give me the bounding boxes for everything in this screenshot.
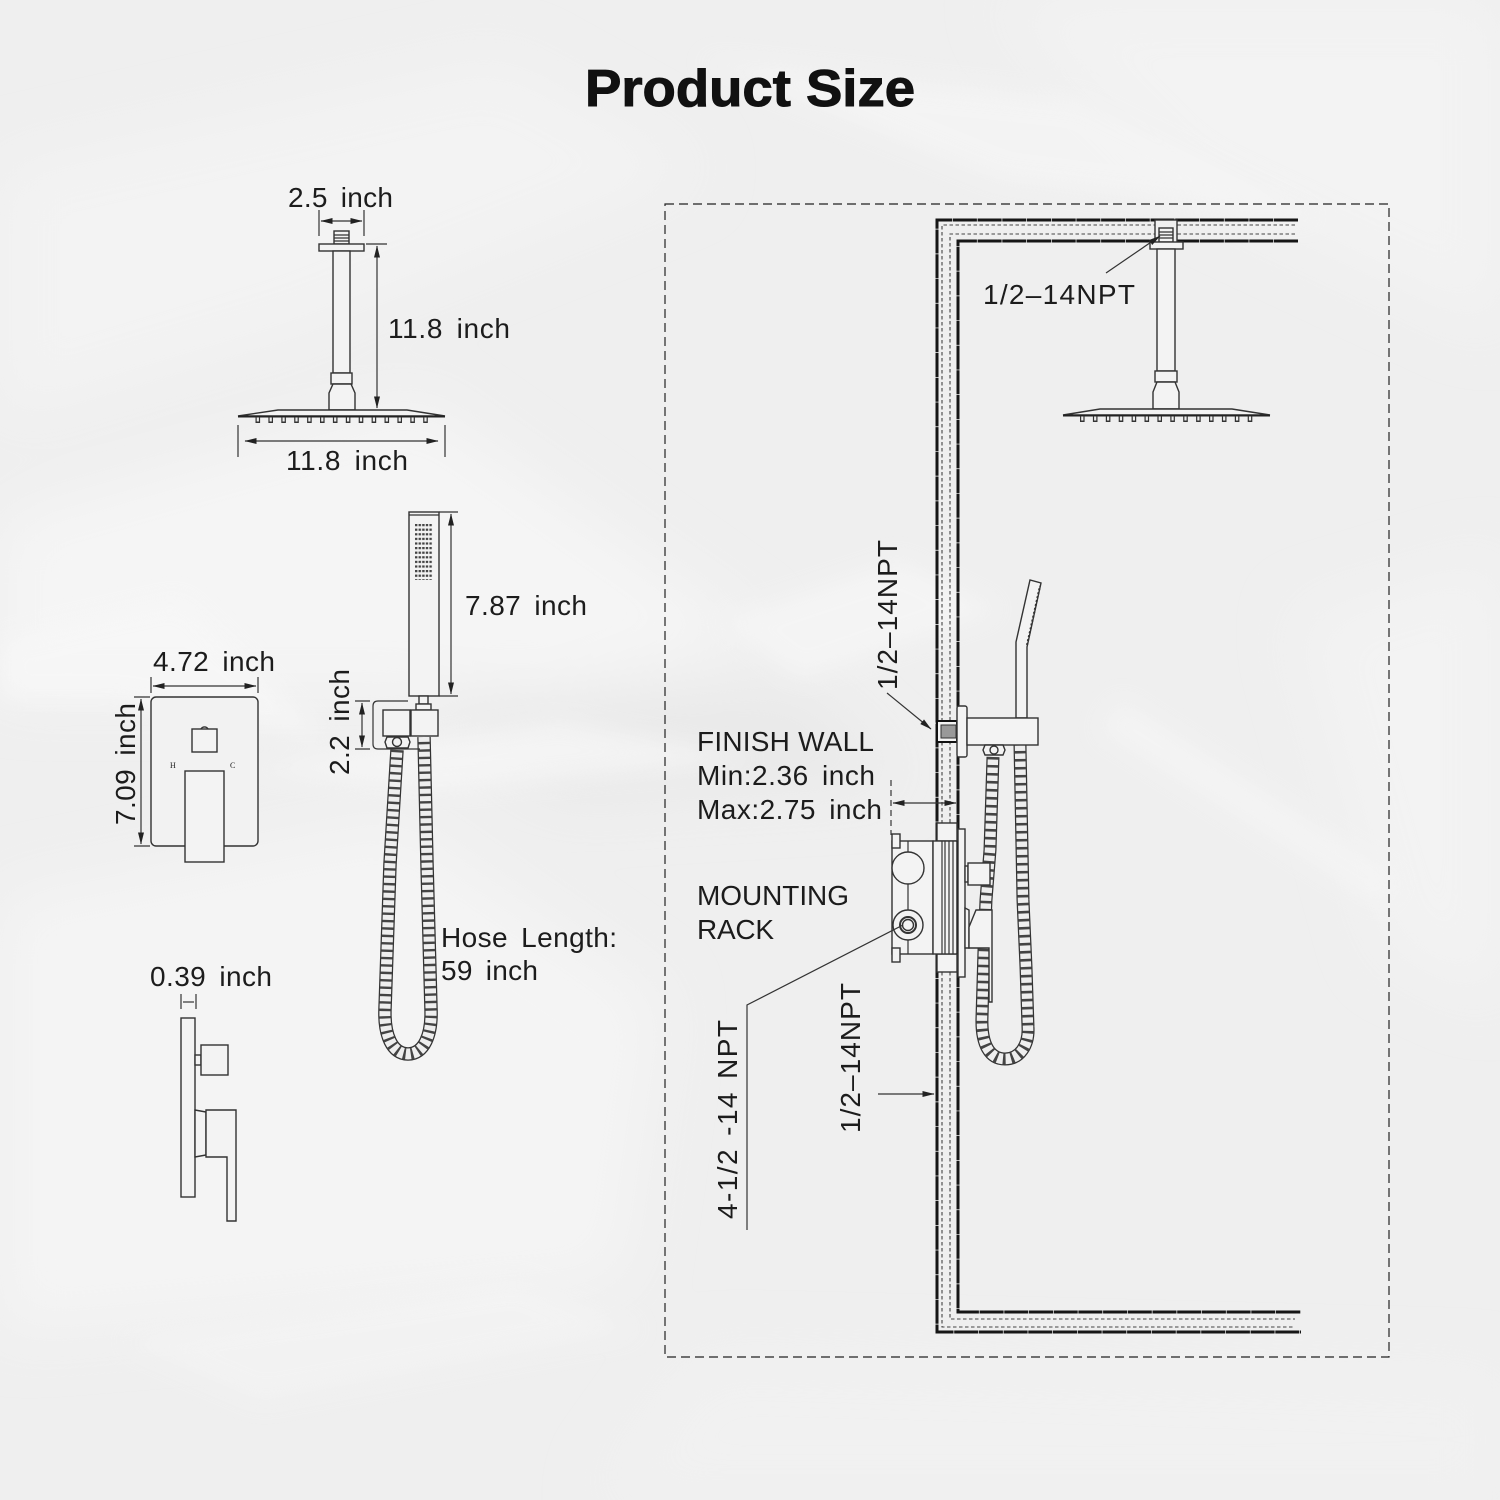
dimension: 7.09 inch bbox=[110, 697, 150, 846]
dimension: 7.87 inch bbox=[439, 512, 587, 696]
diagram: valve trim front view bbox=[110, 646, 275, 862]
dimension: 0.39 inch: 0.39 inch bbox=[150, 961, 272, 992]
dimension: 4.72 inch bbox=[151, 646, 275, 693]
label: finish wall: Min:2.36 inch bbox=[697, 760, 875, 791]
callout: rack port thread size: 4-1/2 -14 NPT bbox=[712, 1020, 743, 1219]
callout: inlet thread size: 1/2–14NPT bbox=[835, 983, 866, 1133]
callout: rack port thread size bbox=[712, 925, 903, 1230]
panel: installation drawing bbox=[665, 204, 1389, 1357]
label: mounting rack: RACK bbox=[697, 914, 774, 945]
label: finish wall bbox=[697, 726, 882, 825]
label: hose length: 59 inch bbox=[441, 955, 538, 986]
dimension: 2.2 inch: 2.2 inch bbox=[324, 669, 355, 775]
icon: trim profile on wall bbox=[958, 829, 992, 1002]
label: hose length bbox=[441, 922, 617, 986]
callout: ceiling thread size: 1/2–14NPT bbox=[983, 279, 1135, 310]
dimension: 7.87 inch: 7.87 inch bbox=[465, 590, 587, 621]
dimension: 7.09 inch: 7.09 inch bbox=[110, 703, 141, 825]
label: finish wall: Max:2.75 inch bbox=[697, 794, 882, 825]
dimension: 0.39 inch bbox=[150, 961, 272, 1009]
icon: trim plate: H bbox=[170, 761, 176, 770]
dimension: 11.8 inch height: 11.8 inch bbox=[388, 313, 510, 344]
icon: mounting rack valve body bbox=[892, 823, 958, 972]
dimension: finish wall depth bbox=[891, 780, 956, 835]
callout: ceiling thread size bbox=[983, 236, 1160, 310]
dimension: 11.8 inch width: 11.8 inch bbox=[286, 445, 408, 476]
icon: hand shower bbox=[409, 512, 439, 710]
dimension: 11.8 inch width bbox=[238, 425, 445, 476]
label: hose length: Hose Length: bbox=[441, 922, 617, 953]
icon: ceiling shower bbox=[1063, 220, 1270, 419]
label: mounting rack bbox=[697, 880, 849, 945]
icon: wall holder bbox=[383, 710, 438, 748]
label: finish wall: FINISH WALL bbox=[697, 726, 874, 757]
title: Product Size bbox=[585, 60, 915, 118]
icon: hand shower on holder bbox=[937, 580, 1041, 757]
diagram: ceiling rain shower dimensions bbox=[238, 182, 510, 476]
dimension: 4.72 inch: 4.72 inch bbox=[153, 646, 275, 677]
icon: trim plate bbox=[151, 697, 258, 862]
dimension: 2.5 inch bbox=[288, 182, 393, 236]
callout: wall thread size: 1/2–14NPT bbox=[872, 540, 903, 690]
icon: shower arm and rain head bbox=[238, 231, 445, 420]
wall section lines bbox=[937, 220, 1301, 1332]
diagram: valve trim side view bbox=[150, 961, 272, 1221]
icon: trim side profile bbox=[181, 1018, 236, 1221]
diagram: hand shower and hose bbox=[324, 512, 617, 1054]
dimension: 2.5 inch: 2.5 inch bbox=[288, 182, 393, 213]
icon: hose loop bbox=[385, 737, 431, 1054]
dimension: 2.2 inch bbox=[324, 669, 420, 775]
icon: wall hose bbox=[982, 745, 1028, 1059]
icon: trim plate: C bbox=[230, 761, 235, 770]
callout: wall thread size bbox=[872, 540, 931, 729]
label: mounting rack: MOUNTING bbox=[697, 880, 849, 911]
